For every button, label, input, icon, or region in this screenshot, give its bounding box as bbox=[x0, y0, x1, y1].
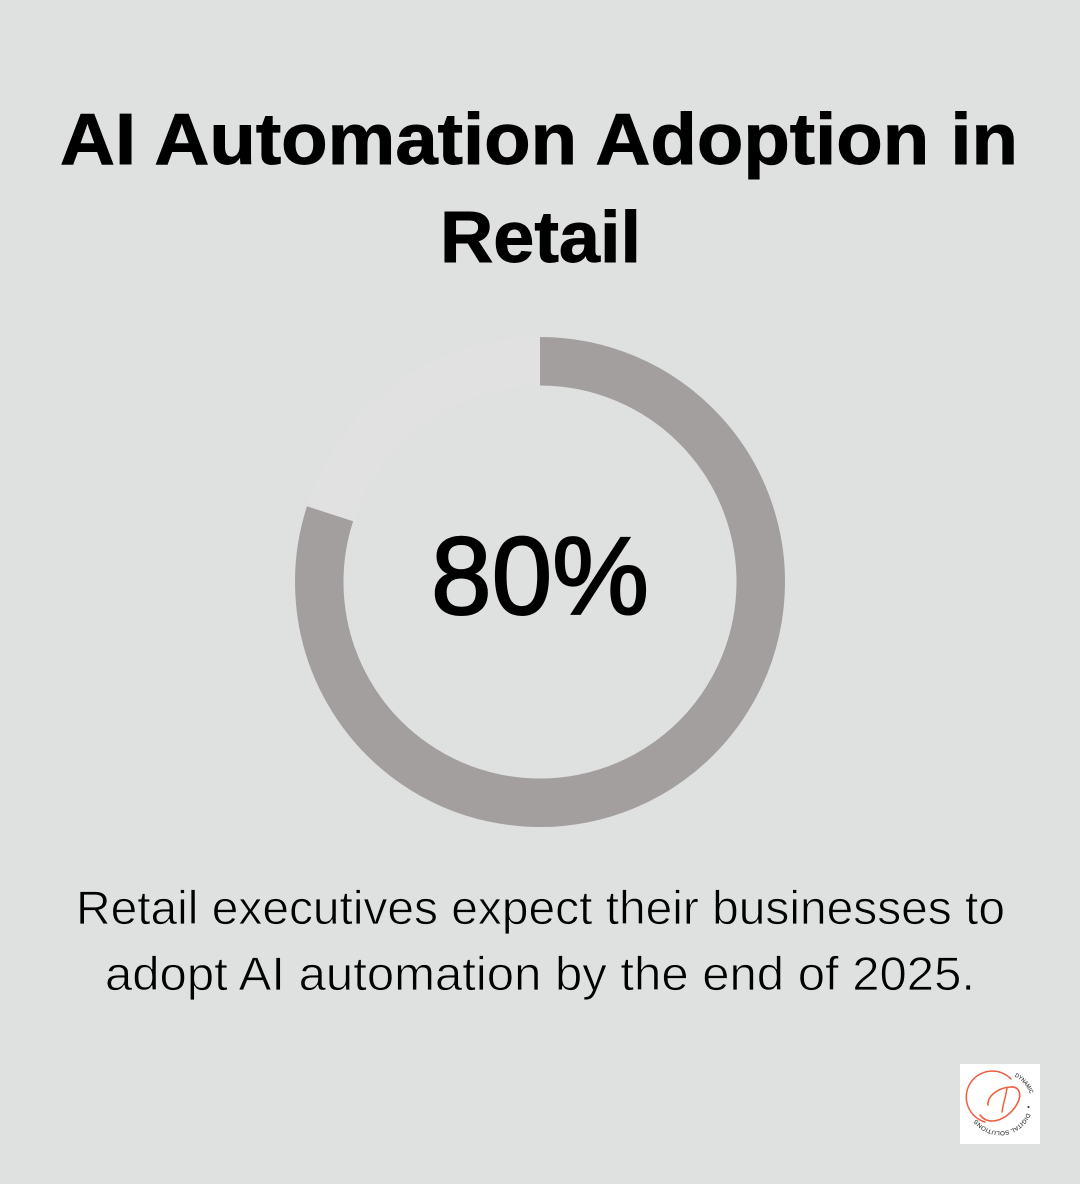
description text bbox=[76, 881, 1005, 1000]
logo ring text bbox=[974, 1073, 1034, 1136]
donut value arc bbox=[319, 361, 761, 803]
description text: Retail executives expect their businesses to bbox=[76, 881, 1005, 934]
logo ring text: DIGITAL SOLUTIONS bbox=[974, 1113, 1030, 1136]
logo: Dynamic Digital Solutions bbox=[960, 1064, 1040, 1144]
title: AI Automation Adoption in bbox=[60, 100, 1018, 180]
percentage value: 80% bbox=[431, 515, 649, 638]
title: Retail bbox=[440, 198, 641, 278]
title bbox=[60, 100, 1018, 278]
description text: adopt AI automation by the end of 2025. bbox=[105, 947, 975, 1000]
donut chart: 80% bbox=[319, 361, 761, 803]
donut remainder track bbox=[330, 361, 540, 514]
logo ring and script D bbox=[966, 1071, 1020, 1122]
logo ring text: DYNAMIC bbox=[1014, 1073, 1034, 1094]
